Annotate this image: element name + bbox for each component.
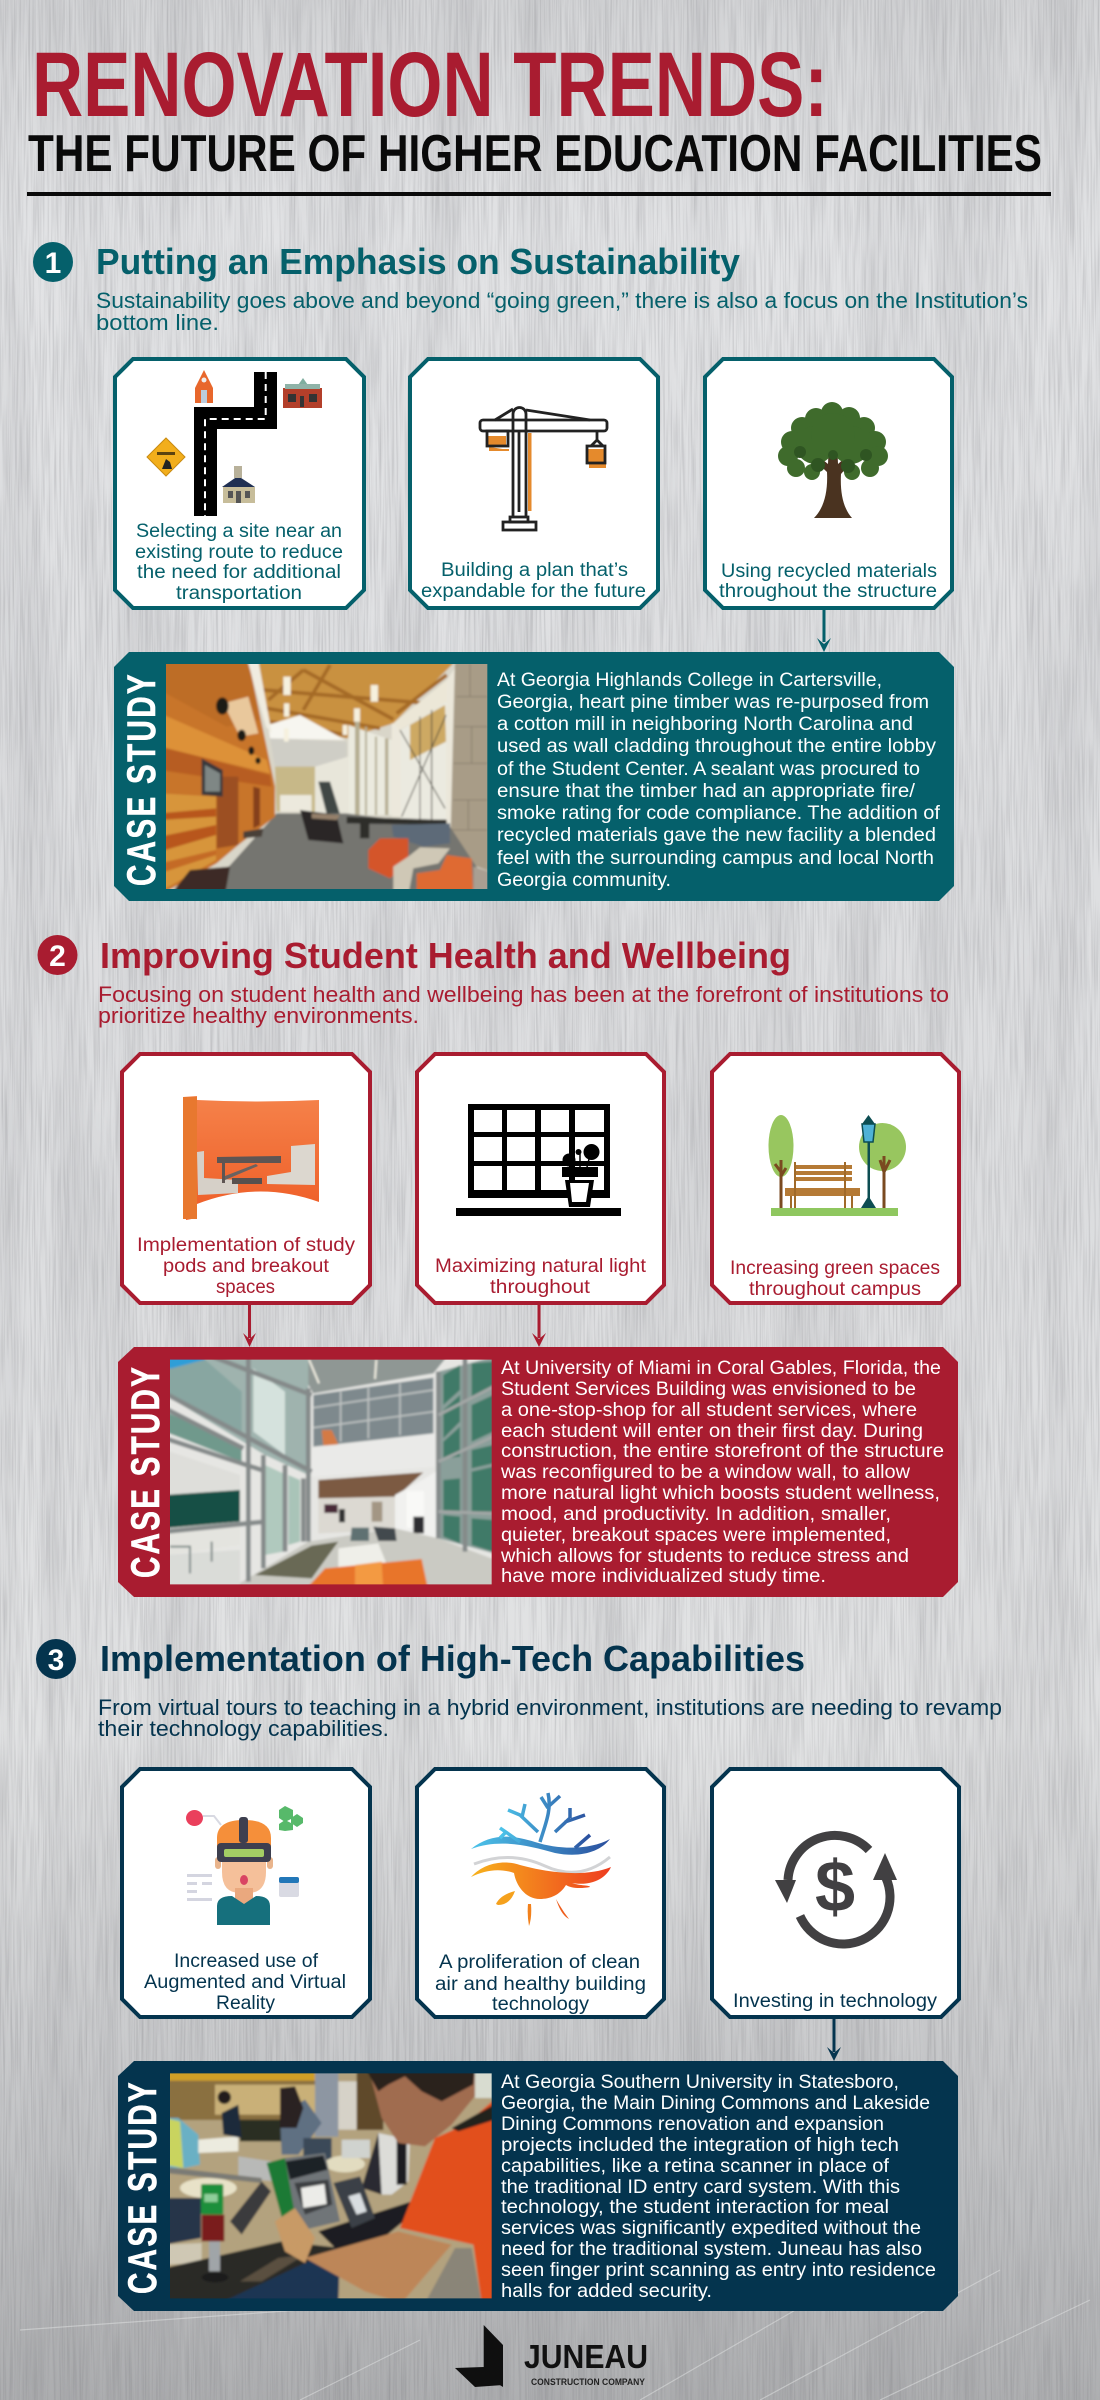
card text: Reality <box>216 1993 276 2014</box>
case study text: a one-stop-shop for all student services, where <box>501 1400 917 1421</box>
card text: expandable for the future <box>421 581 646 602</box>
section 3 number badge: 3 <box>48 1644 64 1677</box>
title <box>27 34 1051 196</box>
card: study pods <box>122 1054 370 1303</box>
case study text: capabilities, like a retina scanner in place of <box>501 2156 890 2177</box>
arrow to case study 2, left <box>243 1305 256 1347</box>
card text <box>435 1952 646 2015</box>
case study text: more natural light which boosts student wellness, <box>501 1483 940 1504</box>
card text <box>719 561 937 602</box>
icon: road with buildings <box>147 370 322 516</box>
case study text: ensure that the timber had an appropriate fire/ <box>497 781 916 802</box>
icon: window with plant <box>456 1104 621 1216</box>
case study text: services was significantly expedited without the <box>501 2218 921 2239</box>
case study text: which allows for students to reduce stress and <box>500 1546 909 1567</box>
logo: Juneau Construction Company <box>455 2325 648 2388</box>
card text <box>435 1256 647 1298</box>
section 1 intro text: Sustainability goes above and beyond “going green,” there is also a focus on the Institution’s <box>96 288 1028 313</box>
case study text <box>501 2072 936 2302</box>
case study text: technology, the student interaction for meal <box>501 2197 889 2218</box>
case study text: the traditional ID entry card system. With this <box>501 2177 900 2198</box>
section 2 number badge <box>38 935 78 975</box>
arrow to case study 2, right <box>532 1305 546 1347</box>
case study text: need for the traditional system. Juneau has also <box>501 2239 922 2260</box>
icon: tree <box>778 402 888 518</box>
card: AR and VR <box>122 1769 370 2017</box>
case study text: Georgia, heart pine timber was re-purposed from <box>497 692 929 713</box>
section 3 intro text: their technology capabilities. <box>98 1716 389 1741</box>
card text: Selecting a site near an <box>136 521 342 542</box>
icon: dollar with circular arrows <box>775 1835 897 1944</box>
card: expandable plan <box>410 359 658 608</box>
card text: technology <box>492 1994 590 2015</box>
case study text: Student Services Building was envisioned to be <box>501 1379 916 1400</box>
case study text: construction, the entire storefront of the structure <box>501 1441 944 1462</box>
card text: Maximizing natural light <box>435 1256 647 1277</box>
case study label: CASE STUDY <box>120 674 164 886</box>
case study text: At Georgia Southern University in Statesboro, <box>501 2072 899 2093</box>
case study text: projects included the integration of high tech <box>501 2135 899 2156</box>
section 3 number badge <box>36 1639 76 1679</box>
arrow to case study 3 <box>827 2019 841 2061</box>
card text: A proliferation of clean <box>439 1952 640 1973</box>
section 2: student health <box>38 935 959 1597</box>
case study text: seen finger print scanning as entry into residence <box>501 2260 936 2281</box>
section 1 number badge <box>33 242 73 282</box>
case study text <box>500 1358 944 1587</box>
card text: Increasing green spaces <box>730 1258 940 1279</box>
case study text: of the Student Center. A sealant was procured to <box>497 759 920 780</box>
case study text: was reconfigured to be a window wall, to allow <box>500 1462 910 1483</box>
case study text: Georgia community. <box>497 870 671 891</box>
icon: person with VR headset <box>186 1806 303 1925</box>
section 3 intro text: From virtual tours to teaching in a hybrid environment, institutions are needing to revamp <box>98 1695 1002 1720</box>
card text: Building a plan that’s <box>441 560 628 581</box>
icon: dollar with circular arrows: $ <box>815 1847 855 1927</box>
case study text: At Georgia Highlands College in Cartersville, <box>497 670 882 691</box>
case study text: each student will enter on their first day. During <box>501 1421 923 1442</box>
icon: study pod <box>183 1096 319 1220</box>
card text <box>137 1235 356 1298</box>
photo: student center lobby <box>160 660 495 895</box>
photo: student services building <box>165 1355 500 1590</box>
logo: Juneau Construction Company: JUNEAU <box>524 2338 648 2375</box>
section 1: sustainability <box>33 241 1028 901</box>
photo: dining commons scanner <box>165 2068 500 2303</box>
case study label: CASE STUDY <box>124 1367 168 1578</box>
section 1 number badge: 1 <box>45 247 61 280</box>
panel: case study 2 <box>118 1347 958 1597</box>
section 2 heading: Improving Student Health and Wellbeing <box>100 935 791 976</box>
case study text: have more individualized study time. <box>501 1566 826 1587</box>
title: RENOVATION TRENDS: <box>32 34 828 136</box>
section 2 number badge: 2 <box>49 940 66 973</box>
card text: Implementation of study <box>137 1235 356 1256</box>
card text: throughout the structure <box>719 581 937 602</box>
case study text: At University of Miami in Coral Gables, Florida, the <box>501 1358 941 1379</box>
card: natural light <box>417 1054 664 1303</box>
case study label: CASE STUDY <box>121 2082 165 2294</box>
section 2 intro text: Focusing on student health and wellbeing has been at the forefront of institutions to <box>98 982 949 1007</box>
section 1 heading: Putting an Emphasis on Sustainability <box>96 241 740 282</box>
icon: park bench <box>768 1115 906 1216</box>
section 2 intro text <box>98 982 949 1028</box>
case study text: recycled materials gave the new facility a blended <box>497 825 936 846</box>
case study text: halls for added security. <box>501 2281 712 2302</box>
card text: existing route to reduce <box>135 542 343 563</box>
section 3 heading: Implementation of High-Tech Capabilities <box>100 1638 805 1679</box>
section 3 intro text <box>98 1695 1002 1741</box>
section 1 intro text: bottom line. <box>96 310 219 335</box>
card text <box>135 521 343 604</box>
card: green spaces <box>712 1054 959 1303</box>
section 2 intro text: prioritize healthy environments. <box>98 1003 419 1028</box>
arrow to case study 1 <box>817 610 831 652</box>
card text: Increased use of <box>174 1951 319 1972</box>
card: clean air <box>417 1769 664 2017</box>
icon: construction crane <box>480 408 607 530</box>
card text: the need for additional <box>137 562 341 583</box>
card text: transportation <box>176 583 302 604</box>
section 1 intro text <box>96 288 1028 335</box>
card text: air and healthy building <box>435 1974 646 1995</box>
card: recycled materials <box>705 359 952 608</box>
card text: throughout <box>490 1277 591 1298</box>
card text <box>421 560 646 602</box>
card text: pods and breakout <box>163 1256 330 1277</box>
case study text <box>497 670 941 891</box>
case study text: Georgia, the Main Dining Commons and Lakeside <box>501 2093 930 2114</box>
logo: Juneau Construction Company: CONSTRUCTION COMPANY <box>531 2377 646 2388</box>
case study text: quieter, breakout spaces were implemented, <box>501 1525 891 1546</box>
card text: Augmented and Virtual <box>144 1972 346 1993</box>
case study text: smoke rating for code compliance. The addition of <box>497 803 941 824</box>
card text: spaces <box>216 1277 275 1298</box>
card text <box>144 1951 346 2014</box>
case study text: mood, and productivity. In addition, smaller, <box>501 1504 891 1525</box>
card: site near existing route <box>115 359 364 608</box>
icon: snowflake and sun <box>471 1793 611 1926</box>
card text: Using recycled materials <box>721 561 937 582</box>
card text: throughout campus <box>749 1279 921 1300</box>
section 3: high-tech capabilities <box>36 1638 1002 2311</box>
panel: case study 1 <box>114 652 954 901</box>
case study text: Dining Commons renovation and expansion <box>501 2114 884 2135</box>
card: investing in technology <box>712 1769 959 2017</box>
card text: Investing in technology <box>733 1991 938 2012</box>
panel: case study 3 <box>118 2061 958 2311</box>
case study text: a cotton mill in neighboring North Carolina and <box>497 714 913 735</box>
case study text: feel with the surrounding campus and local North <box>497 848 934 869</box>
card text <box>730 1258 940 1300</box>
case study text: used as wall cladding throughout the entire lobby <box>497 736 937 757</box>
